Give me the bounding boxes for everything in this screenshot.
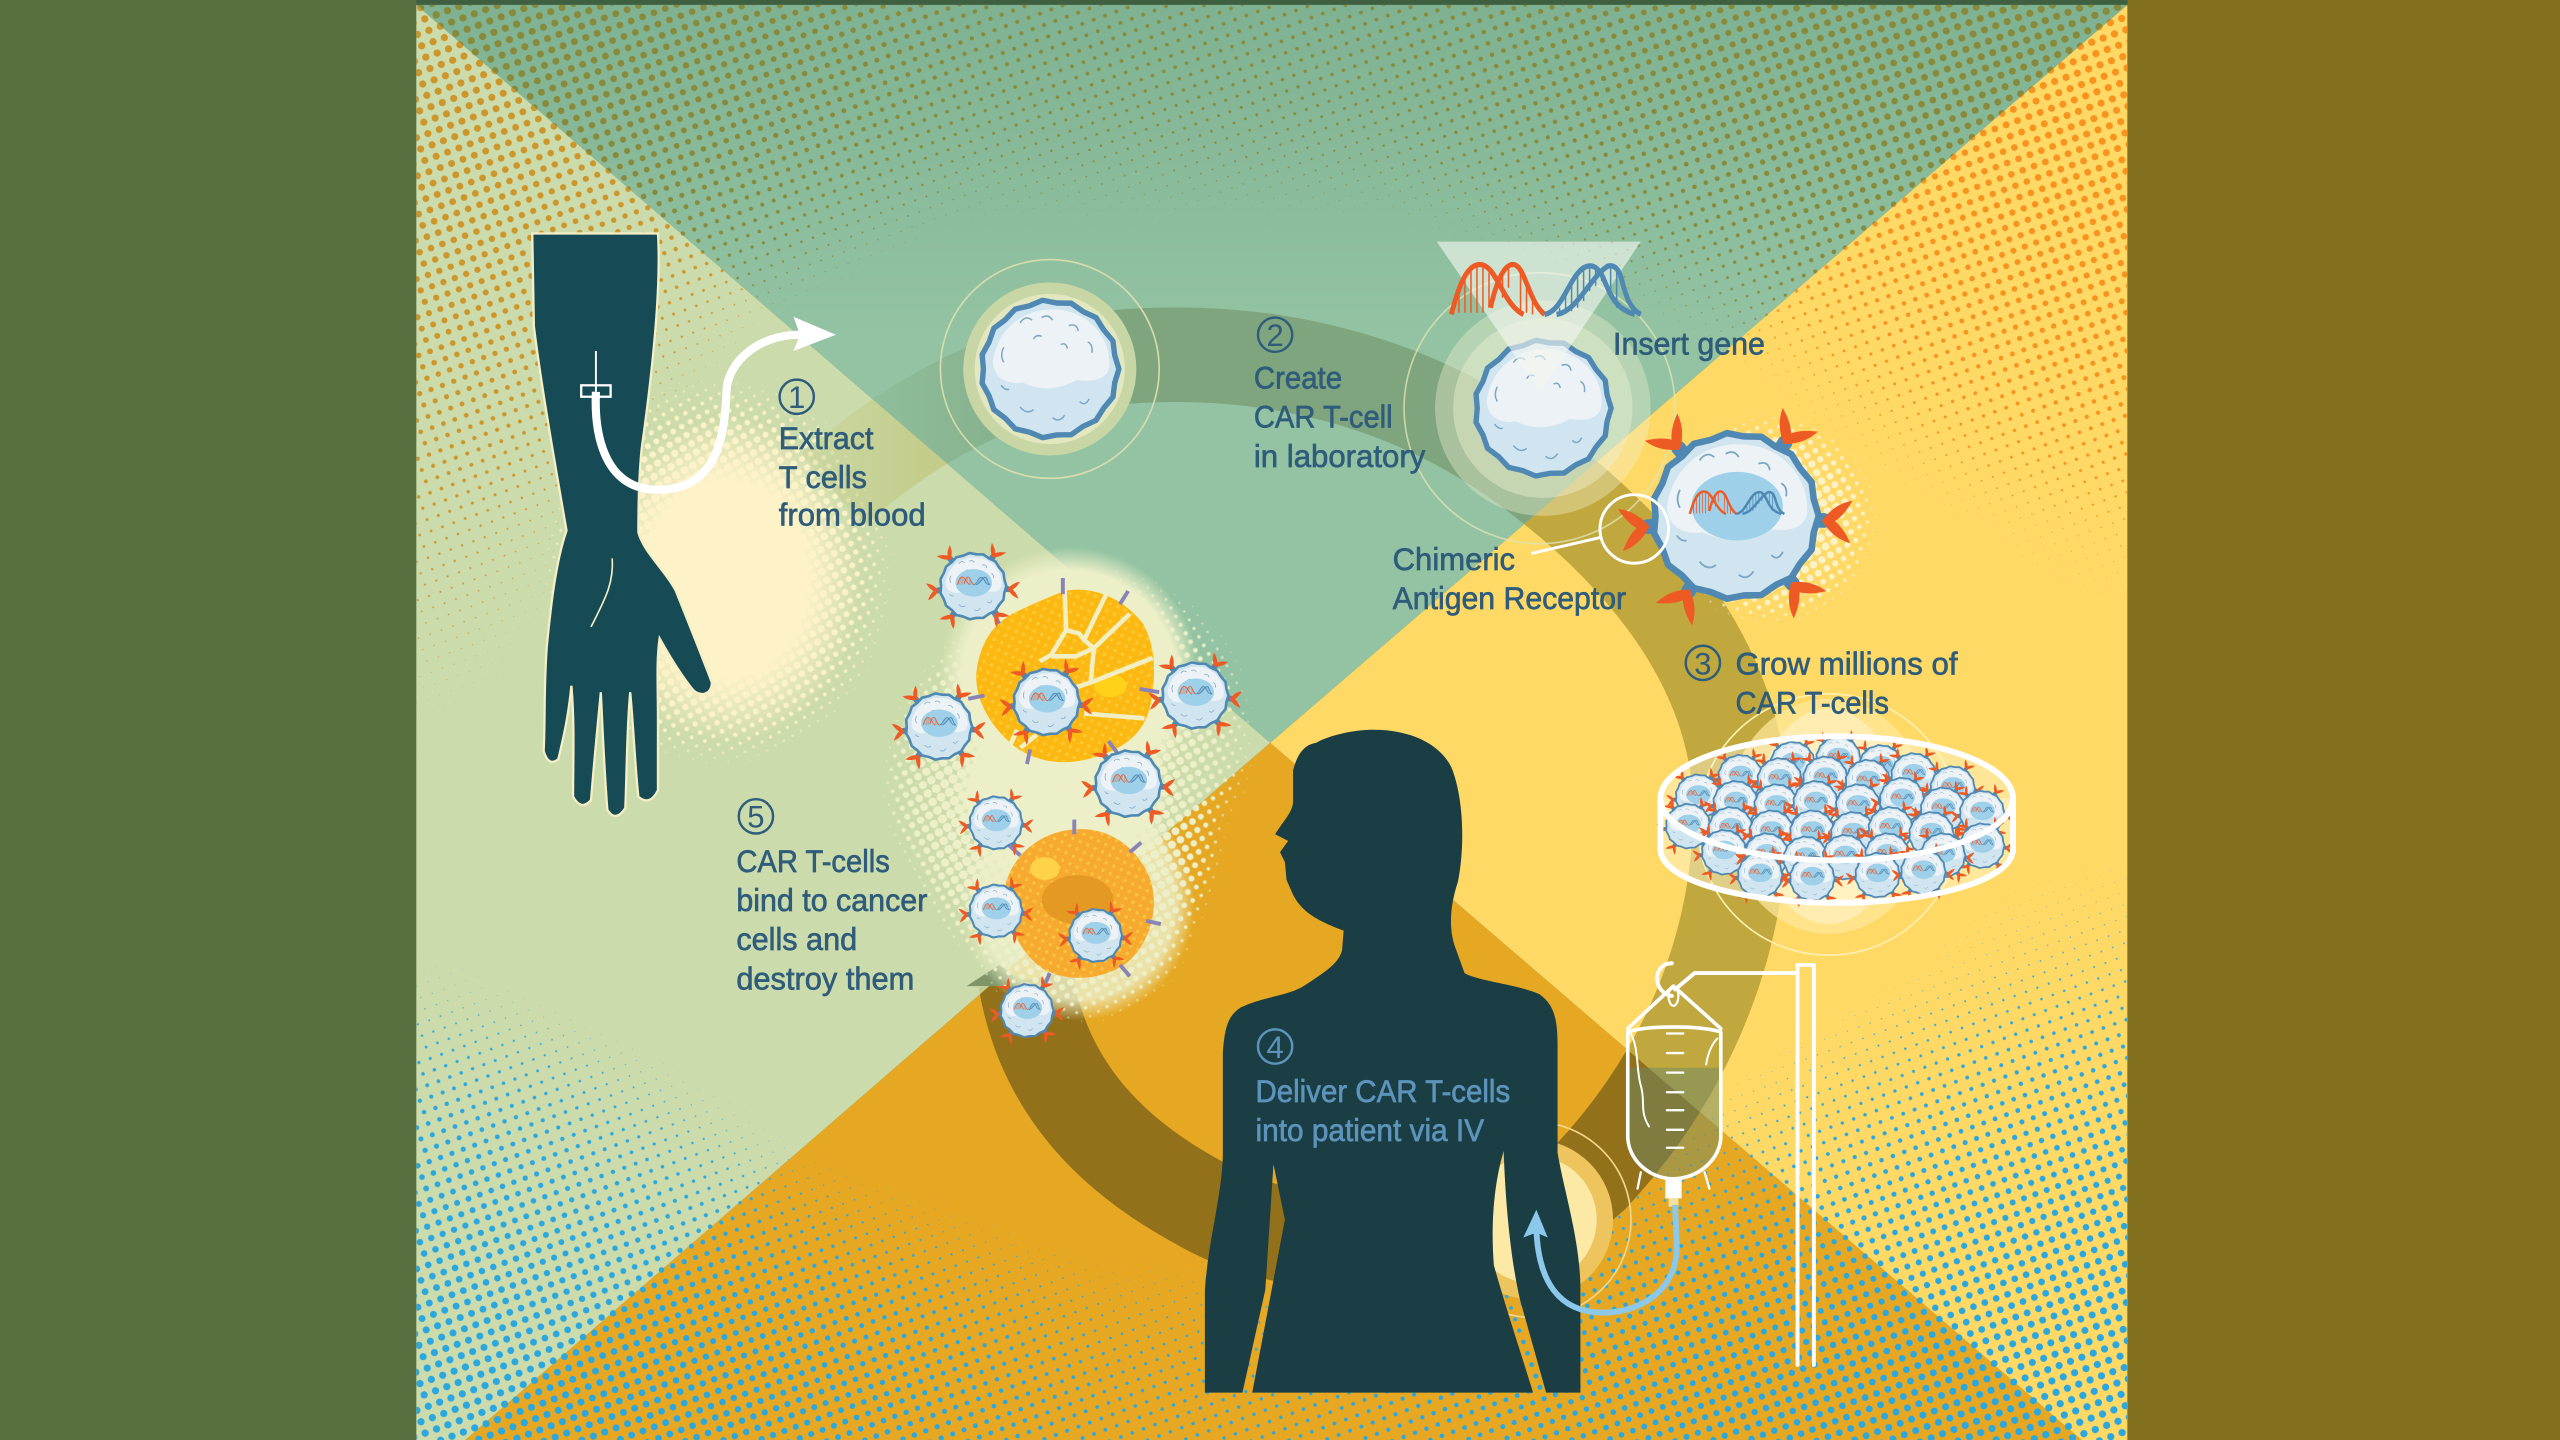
panel: orange bottom quadrant: [465, 743, 2082, 1440]
text: step 5: CAR T-cells: [736, 844, 890, 879]
icon: insertion beam triangle: [1437, 242, 1641, 392]
text: insert gene: Insert gene: [1613, 326, 1765, 361]
text: chimeric antigen receptor: Chimeric: [1393, 542, 1515, 577]
text: step 2: CAR T-cell: [1254, 400, 1393, 435]
panel: green top quadrant: [416, 5, 2127, 743]
text: step 3: 3: [1694, 646, 1711, 681]
panel: yellow right quadrant: [1270, 5, 2127, 1440]
text: step 5: [736, 799, 927, 996]
icon: cancer cell under attack: [1004, 820, 1161, 984]
process band arc: [833, 355, 1740, 1244]
arrow: blood draw tube: [581, 317, 836, 490]
text: chimeric antigen receptor: Antigen Receptor: [1393, 581, 1626, 616]
text: step 2: in laboratory: [1254, 439, 1426, 474]
IV bag body: [1628, 986, 1721, 1189]
text: chimeric antigen receptor: [1393, 542, 1626, 616]
text: step 5: bind to cancer: [736, 883, 927, 918]
icon: CAR T cell: [1618, 408, 1852, 625]
halftone: gold dots top left: [416, 6, 770, 753]
text: step 2: Create: [1254, 361, 1342, 396]
icon: T cell receiving gene: [1476, 340, 1611, 476]
halftone: olive dots in top quadrant: [418, 5, 2127, 362]
glow: cream behind the hand: [542, 376, 893, 767]
text: step 4: into patient via IV: [1256, 1113, 1484, 1148]
text: step 5: destroy them: [736, 961, 914, 996]
icons: CAR T cells attacking: [892, 543, 1242, 1045]
arrow: IV tube into patient: [1523, 1205, 1677, 1313]
halftone: blue dots bottom: [416, 830, 2128, 1440]
text: step 5: 5: [747, 800, 765, 835]
text: step 2: 2: [1266, 318, 1284, 353]
text: step 4: Deliver CAR T-cells: [1256, 1074, 1510, 1109]
text: step 5: cells and: [736, 922, 857, 957]
text: step 1: T cells: [779, 460, 867, 495]
glow rings: T cell in step 1: [940, 260, 1159, 478]
glow rings: petri dish: [1698, 694, 1959, 955]
glow: halftone behind CAR T cell: [1704, 414, 1878, 626]
text: step 2: [1254, 318, 1426, 474]
icon: extracted T cell: [982, 300, 1119, 438]
icon: IV bag and pole: [1628, 963, 1814, 1365]
text: step 4: [1256, 1029, 1510, 1148]
icon: arm and hand: [532, 233, 712, 816]
callout: receptor circle and leader: [1531, 495, 1669, 563]
text: step 1: Extract: [779, 421, 874, 456]
text: step 3: CAR T-cells: [1736, 685, 1889, 720]
glow: halftone around cancer cells: [882, 549, 1256, 1023]
icon: DNA helix: [1451, 264, 1641, 314]
text: step 1: from blood: [779, 498, 926, 533]
text: step 1: [779, 380, 926, 533]
text: step 4: 4: [1266, 1030, 1284, 1065]
halftone: orange dots top right: [1718, 5, 2128, 624]
glow rings: IV entry: [1435, 1122, 1631, 1318]
glow rings: gene insertion: [1404, 273, 1675, 544]
icon: petri dish with CAR T cells: [1656, 730, 2014, 907]
icon: destroyed cancer cell: [968, 578, 1159, 764]
icon: patient silhouette: [1205, 730, 1580, 1393]
panel: pale green left quadrant: [416, 5, 1270, 1440]
arrow: band arrowhead: [967, 965, 1032, 986]
IV pole: [1657, 963, 1814, 1365]
text: step 3: [1686, 646, 1958, 720]
text: step 1: 1: [788, 380, 805, 415]
text: step 3: Grow millions of: [1736, 646, 1958, 681]
